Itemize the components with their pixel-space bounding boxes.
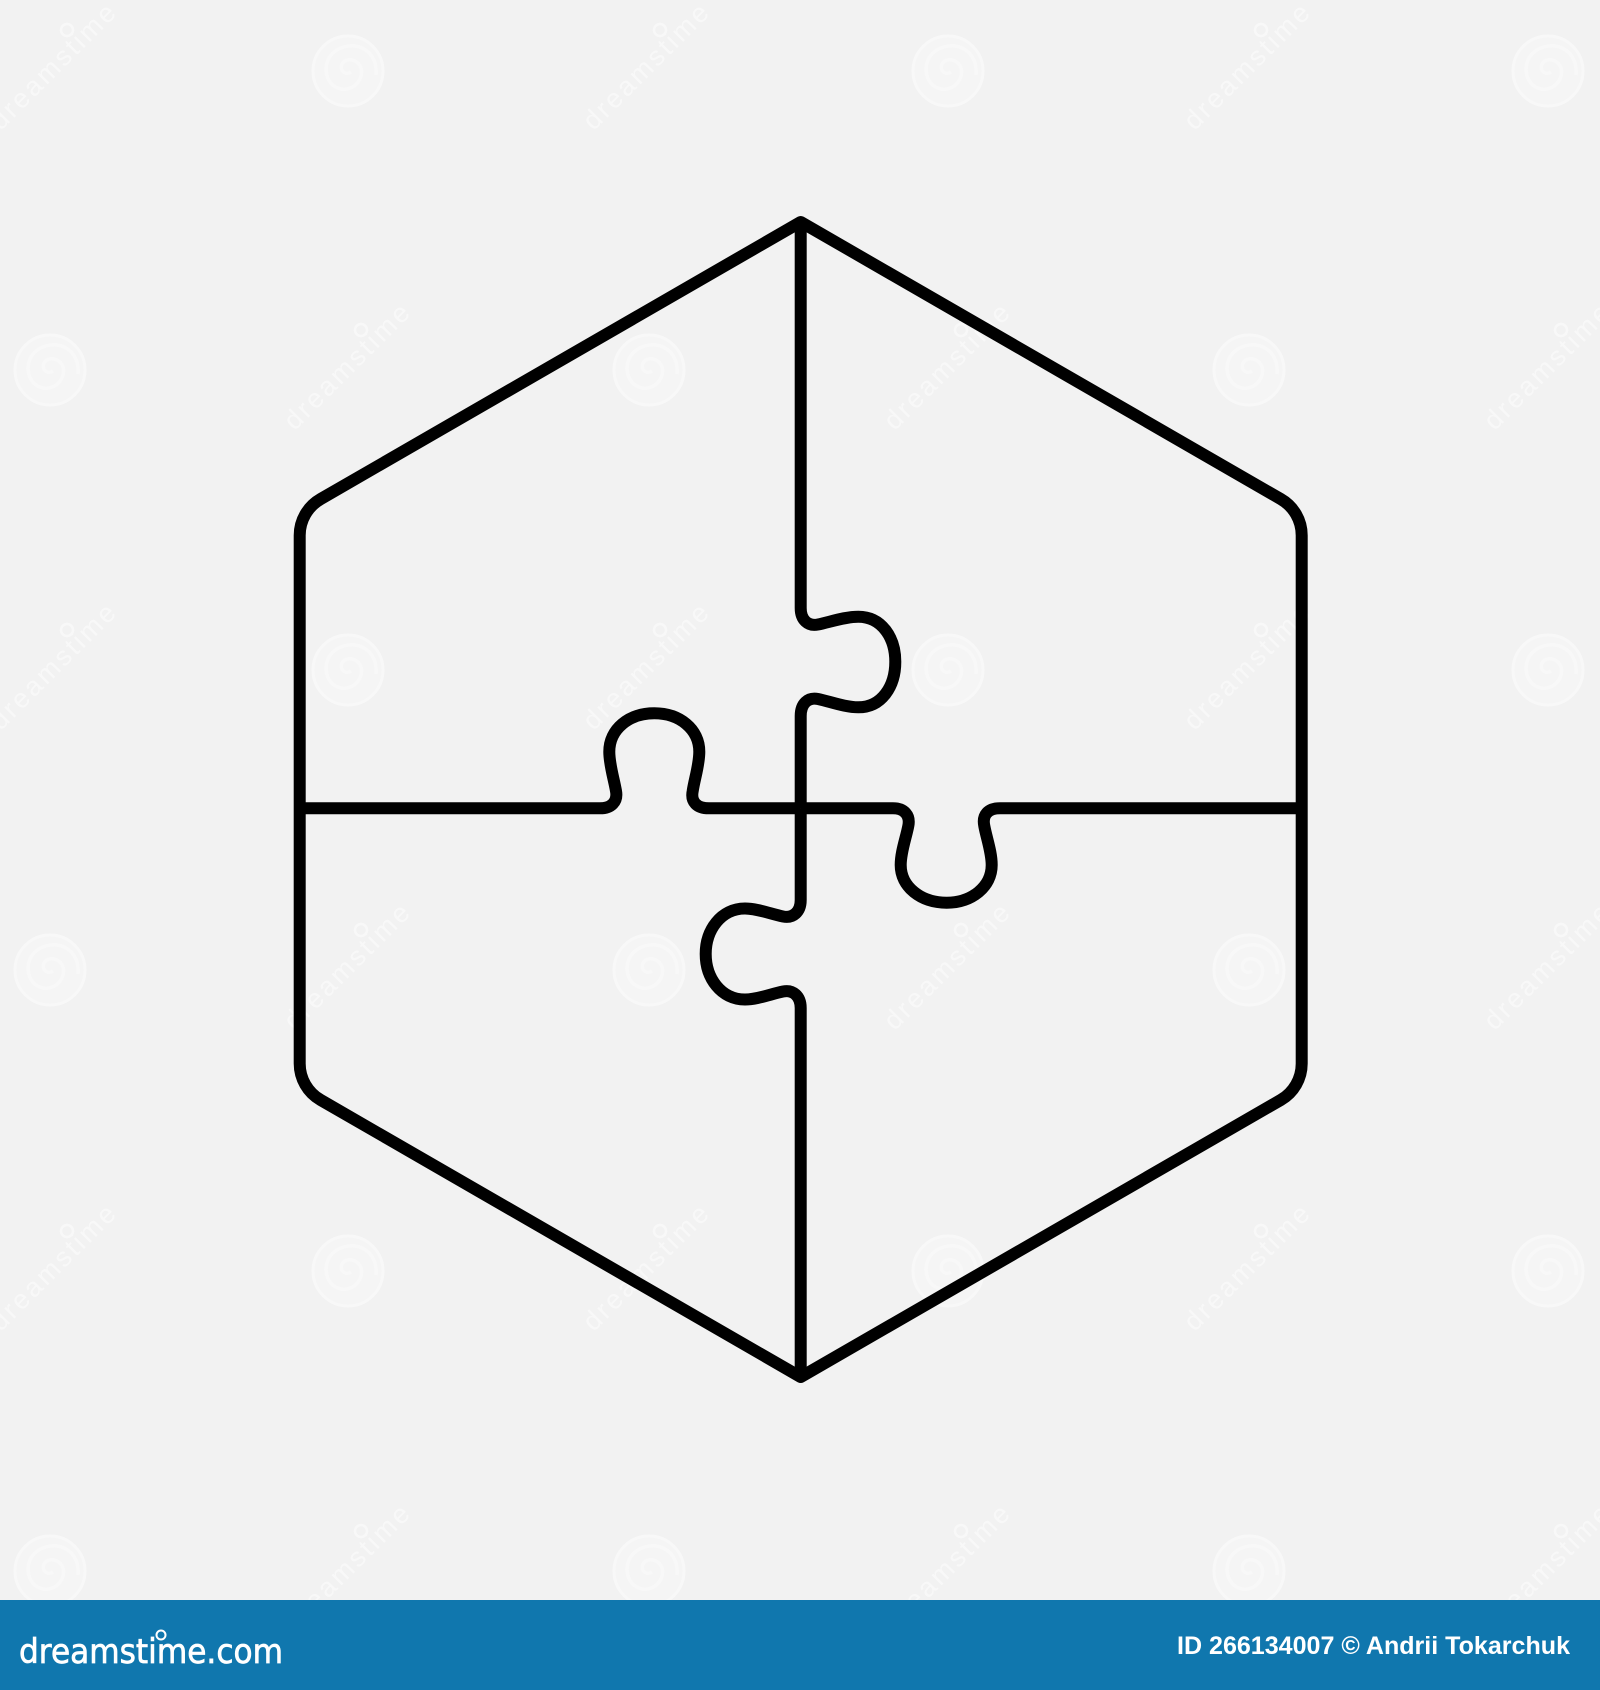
left horizontal joint with upward tab	[300, 713, 801, 808]
watermark pattern: dreamstime	[577, 0, 715, 136]
watermark pattern: dreamstime	[278, 1499, 416, 1637]
watermark pattern: dreamstime	[278, 898, 416, 1036]
upper vertical joint with right-facing tab	[801, 222, 895, 808]
watermark pattern: dreamstime	[577, 1199, 715, 1337]
watermark pattern: dreamstime	[878, 298, 1016, 436]
watermark pattern: dreamstime	[878, 1499, 1016, 1637]
watermark pattern: dreamstime	[1178, 0, 1316, 136]
watermark pattern: dreamstime	[278, 298, 416, 436]
hexagon outline	[300, 222, 1302, 1377]
watermark pattern: dreamstime	[878, 898, 1016, 1036]
footer bar	[0, 1600, 1600, 1690]
watermark pattern: dreamstime	[1178, 598, 1316, 736]
lower vertical joint with left-facing tab	[706, 808, 801, 1377]
watermark pattern: dreamstime	[1178, 1199, 1316, 1337]
right horizontal joint with downward notch	[801, 808, 1302, 903]
watermark pattern: dreamstime	[577, 598, 715, 736]
footer credit: ID 266134007 © Andrii Tokarchuk	[1177, 1632, 1570, 1660]
footer logo: dreamstime.com	[19, 1632, 283, 1672]
hexagon puzzle diagram	[300, 222, 1302, 1377]
